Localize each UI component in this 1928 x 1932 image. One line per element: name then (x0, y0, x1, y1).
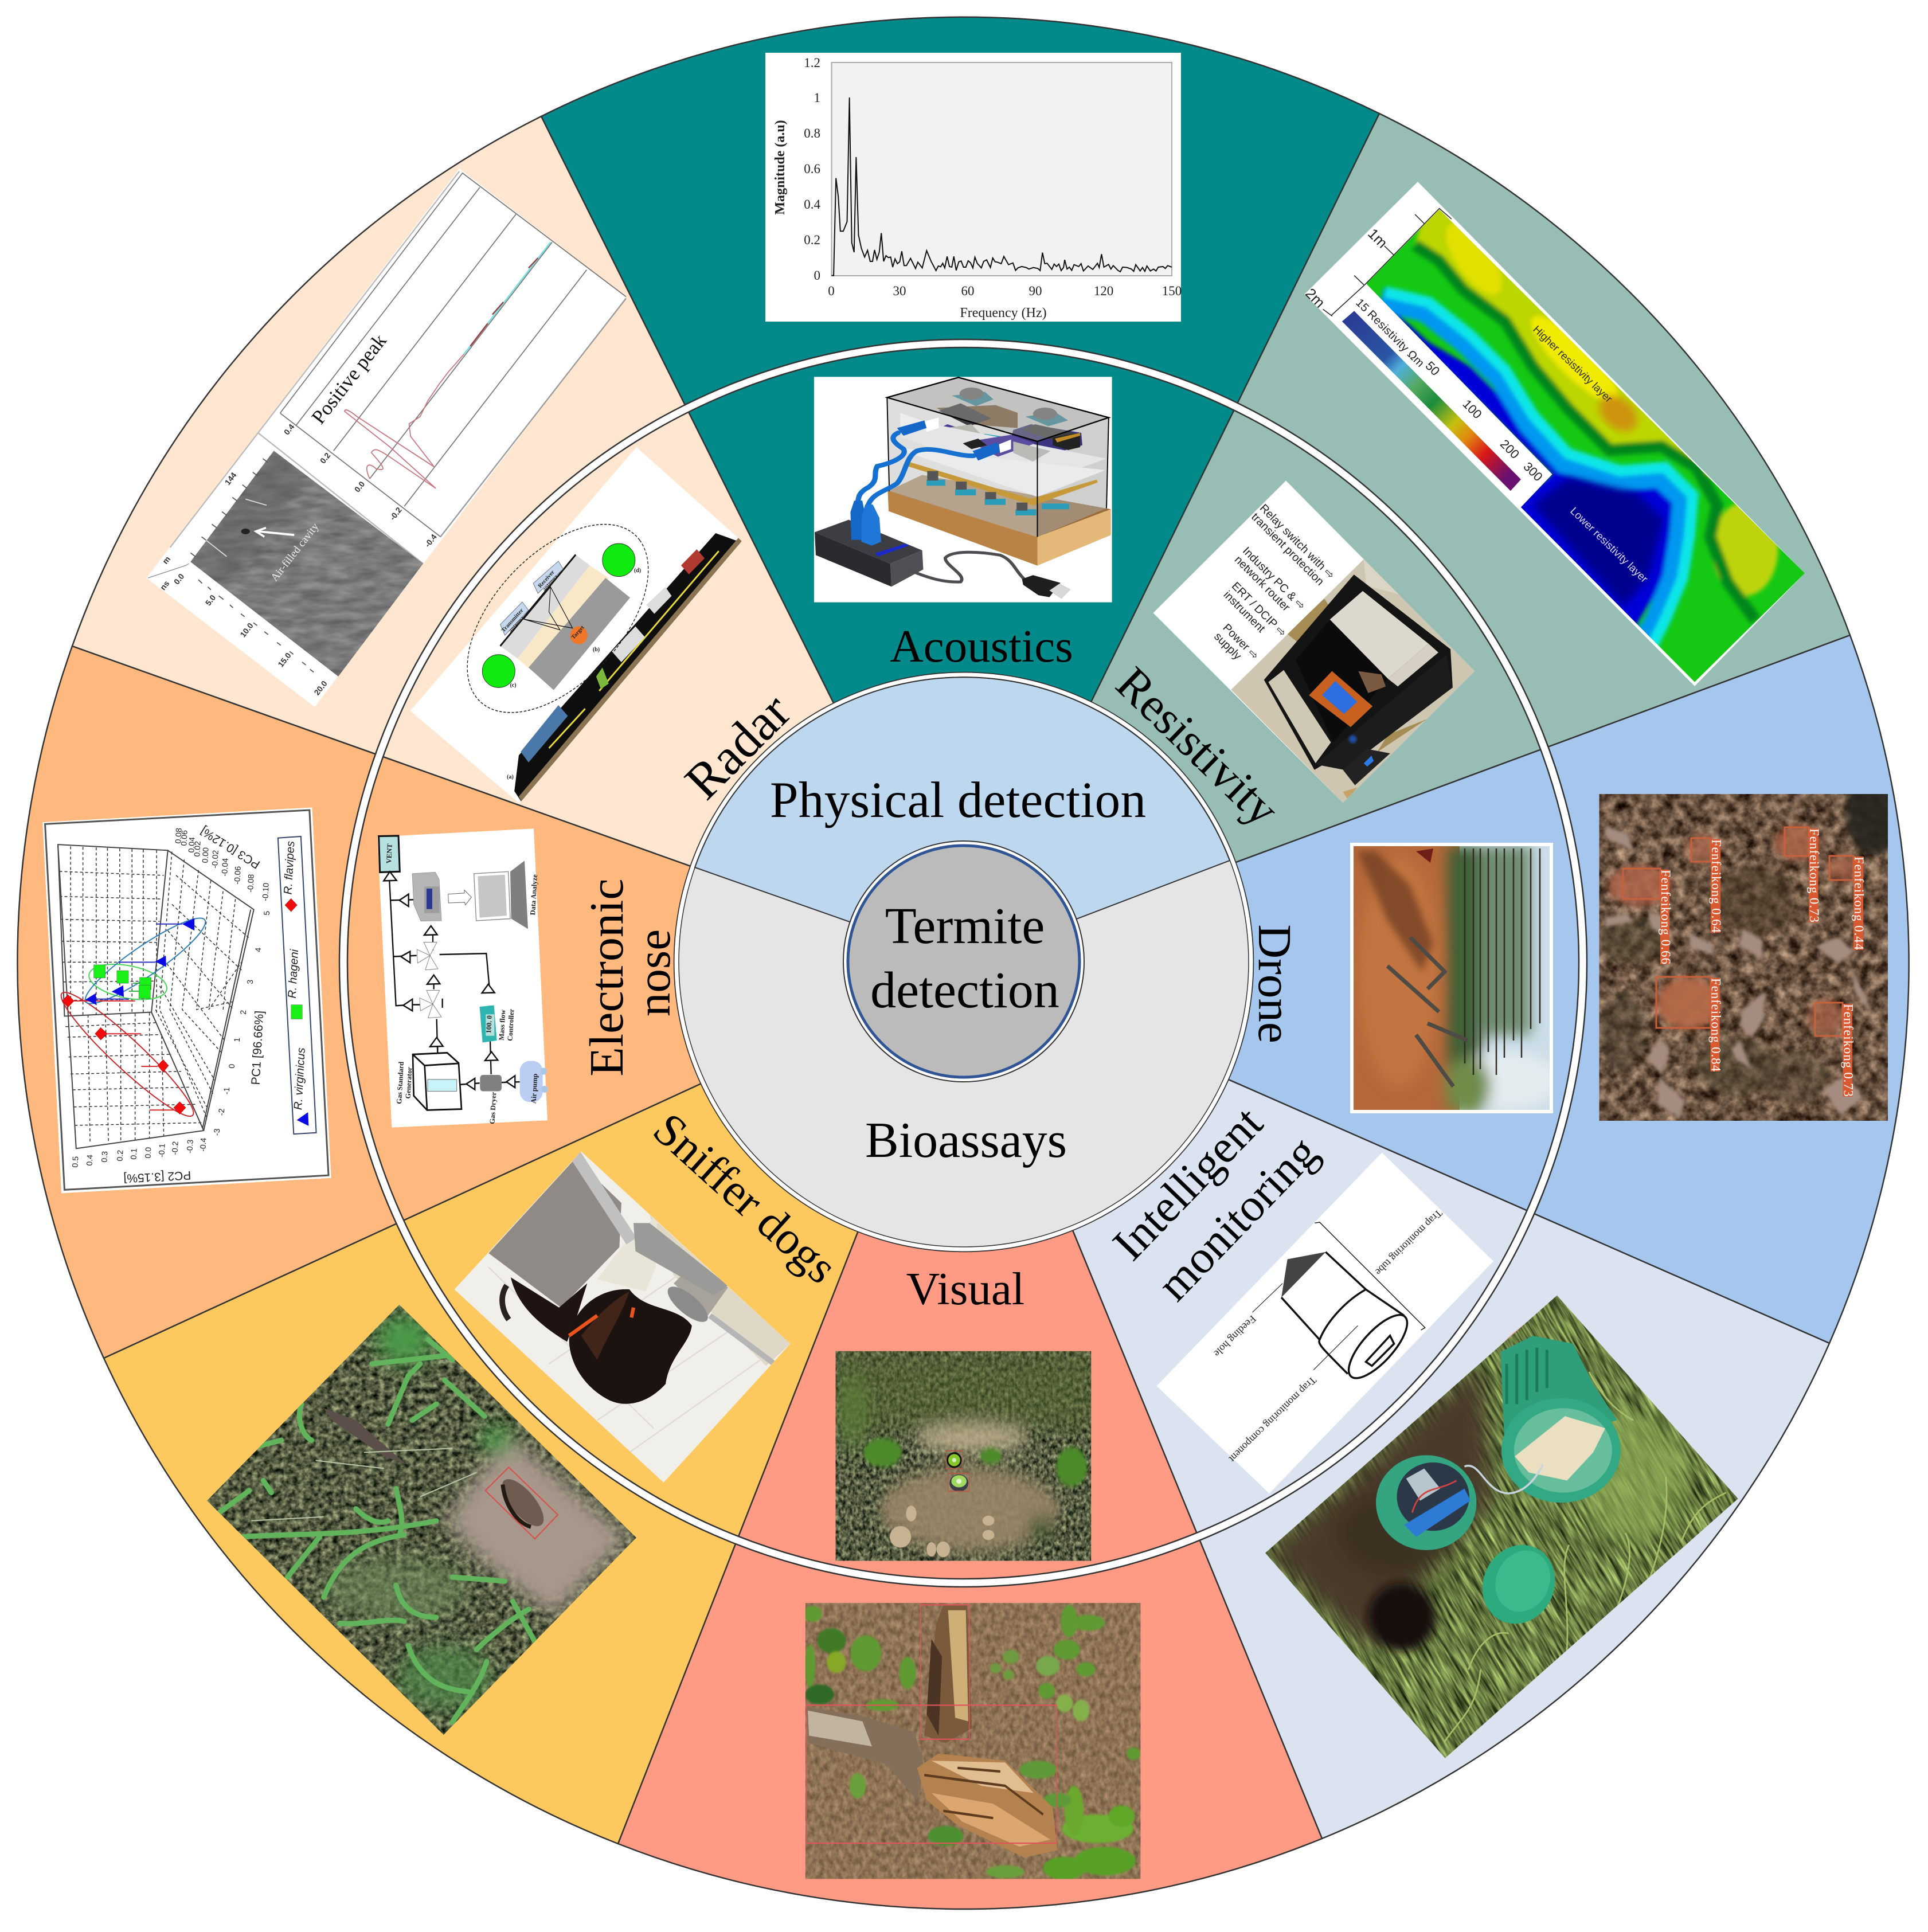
trap labels (1211, 1207, 1445, 1465)
detection label text: Fenfeikong 0.66 (1659, 870, 1673, 964)
axis tick labels: 0.8 (804, 126, 820, 140)
PCA axis titles and legend: -0.10 (260, 882, 271, 901)
colour scale (1342, 311, 1521, 491)
instrument labels: transient protection (1249, 511, 1326, 588)
instrument labels: supply (1211, 630, 1243, 663)
label: Radar: Radar (674, 683, 801, 810)
heading: Physical detection: Physical detection (770, 772, 1146, 828)
gas flow labels: Air pump (530, 1073, 539, 1104)
gas dryer (480, 1075, 502, 1092)
radar tick labels: 144 (223, 471, 238, 487)
PCA axis titles and legend: 1 (232, 1037, 241, 1042)
photo: damaged wood with red boxes (803, 1603, 1140, 1880)
sensor chamber (412, 872, 441, 921)
PCA axis titles and legend: 5 (262, 910, 271, 916)
trap labels: Trap monitoring tube (1373, 1207, 1445, 1278)
mass flow controller (480, 1006, 497, 1043)
PCA axis titles and legend: -1 (222, 1087, 231, 1094)
center circle (843, 841, 1084, 1082)
scale labels: 50 (1423, 358, 1442, 378)
label: Intelligent: Intelligent (1103, 1097, 1273, 1270)
photo: drone on red soil (1350, 843, 1559, 1115)
label: Sniffer dogs: Sniffer dogs (644, 1103, 847, 1293)
trap labels: Feeding hole (1211, 1313, 1258, 1359)
chart: electrical resistivity tomography map (1302, 182, 1828, 693)
trap labels: Trap monitoring component (1227, 1374, 1319, 1465)
PCA axis titles and legend: -0.06 (232, 866, 243, 885)
scale labels: 2m (1302, 286, 1328, 311)
center title: Termite detection: Termite (885, 898, 1045, 955)
road diagram labels: (b) (593, 647, 600, 653)
air pump (520, 1061, 543, 1102)
diagram: electronic nose gas flow (377, 828, 548, 1128)
detection label text: Fenfeikong 0.73 (1841, 1004, 1855, 1097)
PCA axis titles and legend: -0.04 (220, 858, 230, 877)
label: monitoring: monitoring (1147, 1127, 1328, 1311)
axis tick labels: 90 (1028, 284, 1042, 298)
scale labels: 100 (1460, 397, 1485, 421)
scale labels: 15 Resistivity Ωm (1353, 296, 1426, 370)
axis tick labels: 1 (814, 91, 820, 105)
photo: soil image with detection boxes (1600, 794, 1888, 1121)
instrument labels: Power ⇨ (1220, 621, 1261, 662)
panel: visual sector (618, 963, 1322, 1909)
panel: acoustics sector (541, 17, 1379, 963)
instrument labels: Relay switch with ⇨ (1257, 502, 1337, 581)
scale labels: 300 (1520, 459, 1546, 484)
panel: radar sector (72, 116, 963, 963)
axis tick labels: 0 (828, 284, 835, 298)
PCA axis titles and legend (71, 824, 308, 1185)
label: Acoustics: Acoustics (890, 620, 1073, 672)
axis tick labels: Magnitude (a.u) (773, 120, 788, 215)
illustration: acoustic sensor device (814, 377, 1112, 603)
PCA axis titles and legend: PC3 [0.12%] (198, 824, 263, 871)
chart: PCA 3D scatter (42, 807, 331, 1193)
road diagram labels: (c) (510, 682, 517, 689)
axis tick labels: 0.6 (804, 162, 820, 176)
panel: electronic nose sector (17, 646, 963, 1358)
trap cap (1470, 1533, 1568, 1636)
instrument labels (1211, 502, 1337, 663)
panel: sniffer dogs sector (104, 963, 963, 1844)
road diagram labels: antenna (542, 574, 560, 593)
gas flow labels: Data Analyze (529, 874, 539, 916)
label: Drone: Drone (1249, 924, 1301, 1043)
PCA axis titles and legend: -0.4 (198, 1137, 208, 1152)
photo: termite trap in grass (1162, 1140, 1738, 1758)
detection label text: Fenfeikong 0.84 (1708, 978, 1723, 1072)
radar tick labels (158, 422, 439, 697)
radar tick labels: -0.4 (423, 532, 439, 549)
PCA axis titles and legend: -2 (217, 1108, 226, 1116)
detection label text: Fenfeikong 0.64 (1709, 839, 1723, 933)
panel: resistivity sector (963, 114, 1850, 963)
PCA axis titles and legend: R. flavipes (282, 840, 297, 895)
trap tube (1501, 1336, 1617, 1448)
radar tick labels: m (161, 554, 172, 566)
cavity label: Air-filled cavity (268, 521, 322, 584)
PCA axis titles and legend: 0.0 (143, 1147, 153, 1159)
PCA axis titles and legend: 0.06 (179, 830, 189, 846)
axis tick labels: Frequency (Hz) (960, 306, 1047, 320)
heading: Bioassays: Bioassays (865, 1113, 1067, 1168)
detection boxes (1623, 827, 1853, 1036)
PCA axis titles and legend: -3 (212, 1128, 221, 1136)
PCA axis titles and legend: -0.08 (245, 874, 256, 893)
axis tick labels: 0.4 (804, 197, 821, 212)
wood trunk (924, 1605, 972, 1743)
radar tick labels: 20.0 (312, 679, 329, 697)
PCA axis titles and legend: 0.04 (186, 837, 197, 853)
axis tick labels (773, 56, 1182, 320)
radar tick labels: 0.2 (318, 451, 332, 466)
center title: Termite detection: detection (870, 962, 1059, 1019)
PCA axis titles and legend: 3 (245, 979, 255, 984)
panel: intelligent monitoring sector (963, 963, 1829, 1839)
road diagram labels (500, 568, 641, 780)
laptop (474, 871, 510, 921)
road diagram labels: Receiver (537, 569, 556, 589)
PCA axis titles and legend: R. virginicus (292, 1047, 308, 1110)
radar tick labels: ns (158, 578, 171, 592)
photo: visual survey field (836, 1351, 1091, 1561)
axis tick labels: 1.2 (804, 56, 820, 70)
radar tick labels: -0.2 (388, 505, 404, 522)
blue triangles (85, 918, 308, 1126)
leaves (803, 1605, 1140, 1880)
axis tick labels: 30 (893, 284, 906, 298)
photo: sniffer dog (452, 1147, 795, 1489)
gas flow labels: Mass flow (498, 1010, 507, 1041)
diagram: road radar survey (410, 447, 745, 805)
scale labels: 1m (1364, 226, 1390, 251)
scale labels: 200 (1497, 437, 1522, 462)
PCA axis titles and legend: 0.00 (200, 847, 210, 863)
radar tick labels: 15.0 (276, 651, 293, 669)
PCA axis titles and legend: 0.5 (71, 1156, 80, 1168)
gas generator (413, 1053, 462, 1110)
label: nose: nose (627, 929, 680, 1016)
road diagram labels: Target (570, 624, 586, 640)
label: Resistivity: Resistivity (1106, 656, 1289, 836)
grid (60, 846, 250, 1144)
instrument labels: Industry PC & ⇨ (1240, 545, 1308, 612)
chart: ground penetrating radar trace and radargram (146, 169, 626, 707)
label: Electronic: Electronic (580, 878, 633, 1077)
instrument labels: network router (1232, 553, 1292, 614)
radar trace (345, 354, 464, 488)
map (1366, 210, 1805, 682)
PCA axis titles and legend: 0.02 (192, 841, 202, 857)
instrument labels: ERT / DCIP ⇨ (1229, 580, 1289, 639)
label: Visual: Visual (906, 1263, 1024, 1315)
PCA axis titles and legend: 4 (253, 947, 263, 952)
inner ring: detection categories (674, 672, 1253, 1252)
layered ground model (500, 555, 590, 659)
PCA axis titles and legend: 0.3 (100, 1151, 109, 1163)
PCA axis titles and legend: 0.4 (85, 1154, 95, 1166)
photo: termite hole on ground (203, 1300, 642, 1738)
radar tick labels: 10.0 (238, 621, 255, 639)
photo: resistivity instrument cabinet with labels (1153, 480, 1487, 816)
red diamonds (62, 898, 297, 1114)
axis tick labels: 0.2 (804, 233, 820, 247)
PCA axis titles and legend: 2 (238, 1010, 248, 1015)
PCA axis titles and legend: -0.3 (185, 1139, 195, 1153)
radar tick labels: 0.0 (353, 479, 366, 494)
gas flow labels: Gas Dryer (488, 1092, 498, 1124)
PCA axis titles and legend: PC1 [96.66%] (249, 1010, 266, 1085)
road diagram labels: (a) (507, 774, 514, 780)
panel: drone sector (963, 635, 1909, 1343)
axis tick labels: 120 (1094, 284, 1113, 298)
gas flow labels (385, 843, 539, 1124)
PCA axis titles and legend: 0.2 (115, 1149, 125, 1161)
detection label text (1659, 828, 1866, 1097)
radargram image (187, 447, 427, 680)
axis tick labels: 60 (961, 284, 975, 298)
PCA axis titles and legend: 0.08 (173, 828, 183, 844)
radar tick labels: 0.0 (172, 572, 186, 586)
green squares (94, 965, 302, 1019)
physical detection segment (695, 677, 1230, 962)
road diagram labels: (d) (634, 568, 641, 574)
chart: acoustic frequency spectrum (765, 53, 1182, 322)
PCA axis titles and legend: R. hageni (286, 949, 301, 999)
gas flow labels: VENT (385, 843, 394, 864)
road diagram labels: antenna (508, 615, 526, 634)
PCA axis titles and legend: -0.2 (170, 1141, 180, 1155)
detection label bars (1660, 828, 1863, 1097)
gas flow labels: Gas Standard (395, 1061, 405, 1104)
PCA axis titles and legend: -0.1 (157, 1143, 167, 1157)
green markers (947, 1452, 962, 1468)
PCA axis titles and legend: -0.02 (210, 850, 220, 869)
illustration: termite trap diagram (1157, 1153, 1493, 1493)
spectrum line (832, 97, 1172, 276)
radar tick labels: 0.4 (282, 422, 296, 437)
detection label text: Fenfeikong 0.73 (1807, 828, 1821, 922)
axis tick labels: 150 (1162, 284, 1182, 298)
ring separating sample photos (339, 339, 1587, 1587)
radar tick labels: 5.0 (204, 593, 217, 608)
gas flow labels: Controller (506, 1008, 515, 1041)
cluster ellipses (54, 906, 211, 1128)
valves (417, 942, 441, 1018)
instrument labels: instrument (1221, 589, 1268, 635)
positive peak label: Positive peak (307, 330, 391, 428)
road diagram labels: Transmitter (500, 607, 525, 633)
map layer labels: Higher resistivity layer (1531, 323, 1615, 405)
gas flow labels: Generator (404, 1066, 413, 1099)
flow triangles (384, 871, 515, 1090)
trap electronics (1376, 1455, 1476, 1550)
PCA axis titles and legend: 0.1 (129, 1148, 139, 1160)
road strip (514, 533, 745, 805)
axis tick labels: 0 (814, 268, 820, 283)
PCA axis titles and legend: 0 (227, 1063, 236, 1069)
detection label text: Fenfeikong 0.44 (1852, 857, 1866, 951)
scale labels (1302, 226, 1546, 484)
PCA axis titles and legend: PC2 [3.15%] (123, 1168, 191, 1185)
gas flow labels: 100. 0 (484, 1015, 494, 1034)
chart: electrical resistivity tomography map: Lower resistivity layer (1568, 504, 1651, 585)
